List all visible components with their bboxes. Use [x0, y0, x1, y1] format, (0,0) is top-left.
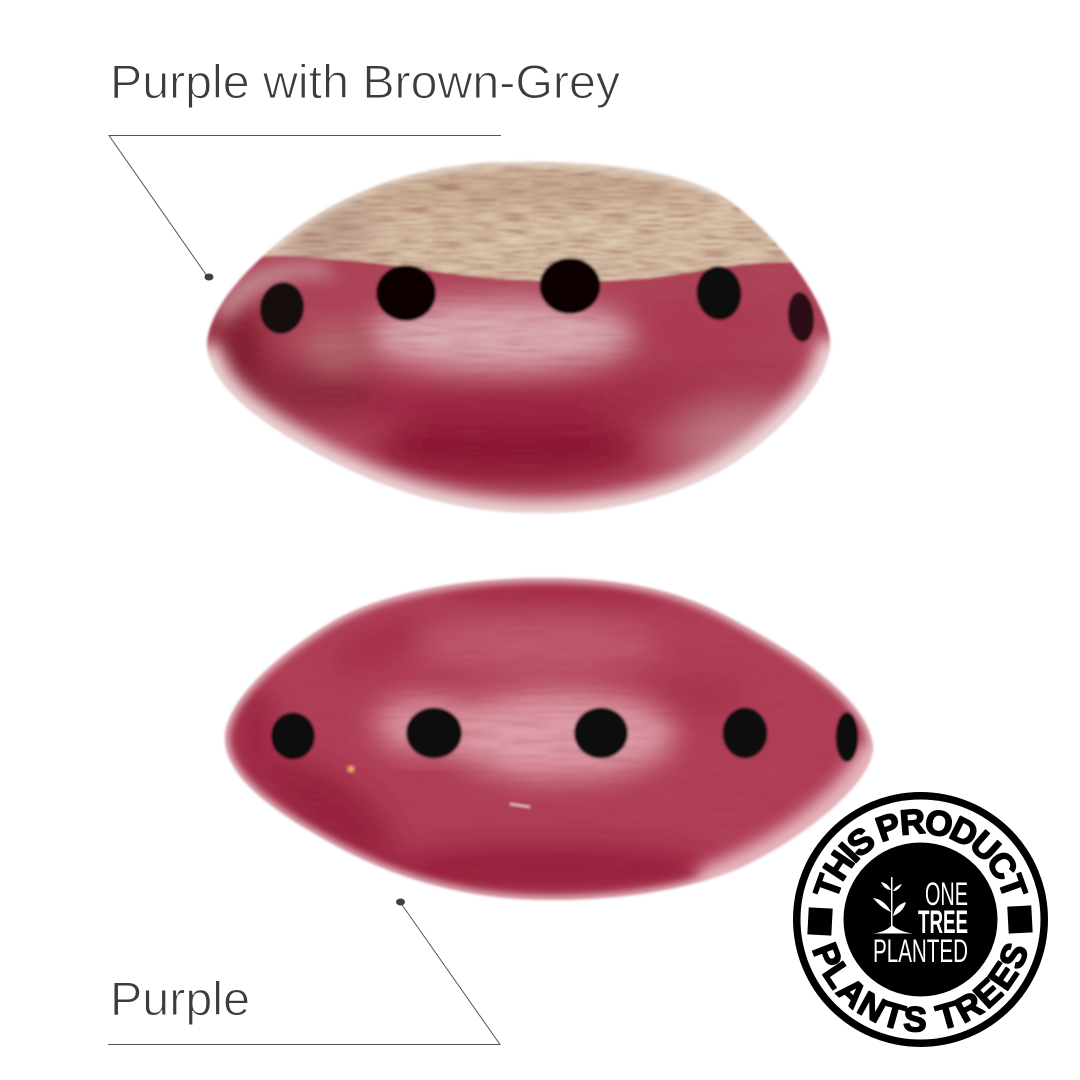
pale highlight [445, 691, 675, 779]
pale lower edge [670, 400, 830, 480]
purple wood grain [263, 268, 812, 376]
base purple wood [210, 570, 890, 910]
soft outline [225, 578, 873, 900]
badge text: lower arc: PLANTS TREES [812, 942, 1028, 1032]
ocarina: purple wood [210, 570, 890, 910]
sapwood cap [262, 160, 792, 284]
pale highlight [365, 299, 635, 371]
badge text: upper arc: THIS PRODUCT [812, 808, 1028, 894]
base purple wood [206, 254, 832, 514]
callout leader: top label [109, 136, 501, 280]
heading: Purple with Brown-Grey: Purple with Brown-Grey [110, 55, 621, 108]
finger holes: top ocarina [256, 258, 816, 343]
ocarina: purple with brown-grey wood [205, 160, 832, 514]
glint [348, 766, 354, 772]
logo text: ONE: ONE [925, 876, 968, 912]
shoulder above left holes [215, 262, 340, 325]
callout leader: bottom label [108, 898, 500, 1044]
finger holes: bottom ocarina [271, 708, 858, 762]
logo text: PLANTED: PLANTED [873, 933, 968, 969]
badge: this product plants trees [793, 792, 1048, 1047]
heading: Purple: Purple [110, 972, 250, 1025]
logo text: TREE: TREE [918, 904, 968, 940]
wood grain [272, 692, 856, 782]
badge separators [807, 905, 1033, 936]
icon: seedling [873, 877, 913, 934]
